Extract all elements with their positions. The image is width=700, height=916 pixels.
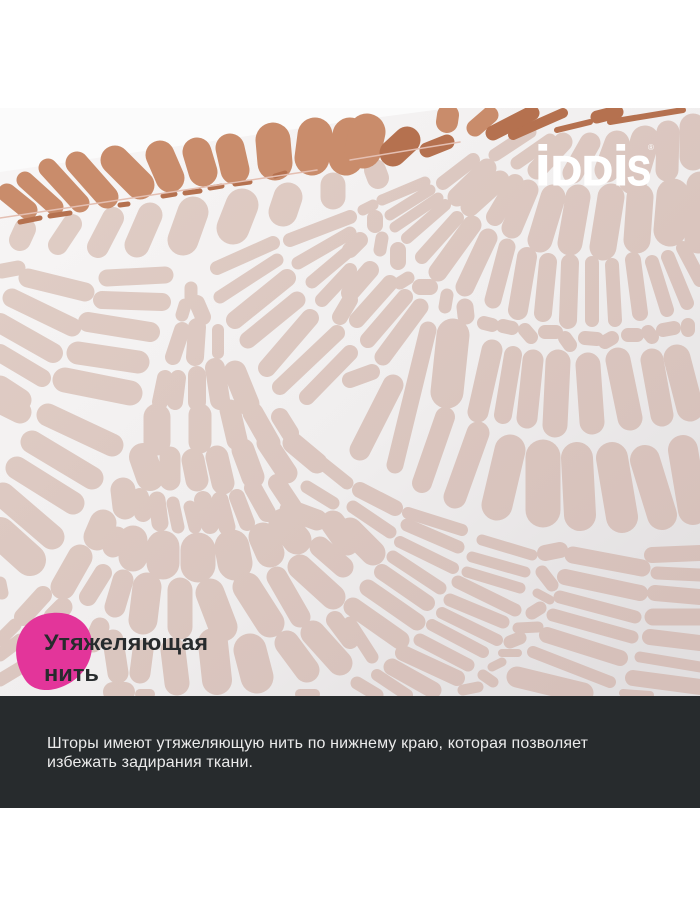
right fan inner rows xyxy=(422,350,693,517)
hem brown stripes xyxy=(7,115,490,210)
dark caption panel xyxy=(0,696,700,808)
left fan xyxy=(0,268,165,560)
infographic canvas xyxy=(0,108,700,808)
central triangular fan xyxy=(123,288,347,527)
dark caption panel: избежать задирания ткани. xyxy=(47,754,253,771)
logo: iDDiS: i xyxy=(613,134,629,197)
hem stitching xyxy=(0,142,460,218)
logo: iDDiS xyxy=(535,134,654,197)
logo: iDDiS: ® xyxy=(648,143,654,152)
lower right fan xyxy=(350,490,700,695)
upper central diagonal fan xyxy=(217,217,350,397)
pink blob xyxy=(16,613,92,690)
row under the hem xyxy=(20,170,378,247)
fabric base xyxy=(0,108,700,696)
fabric photo xyxy=(0,108,700,696)
lower central rows xyxy=(0,523,350,694)
logo: iDDiS: S xyxy=(627,147,651,194)
logo: iDDiS: i xyxy=(535,134,551,197)
heading text: Утяжеляющая xyxy=(44,630,208,655)
hem dark folded stripes xyxy=(20,110,683,222)
right big fan outer rows xyxy=(350,127,700,465)
caption text: Шторы имеют утяжеляющую нить по нижнему краю, которая позволяет xyxy=(47,735,589,752)
hem with brown pattern xyxy=(0,110,683,222)
heading with pink blob xyxy=(16,613,208,690)
small wavy row xyxy=(484,323,688,345)
logo: iDDiS: D xyxy=(582,147,613,194)
logo: iDDiS: D xyxy=(551,147,582,194)
panel background xyxy=(0,696,700,808)
area above hem xyxy=(274,108,439,130)
heading with pink blob: нить xyxy=(44,661,99,686)
beige scale pattern xyxy=(0,127,700,695)
